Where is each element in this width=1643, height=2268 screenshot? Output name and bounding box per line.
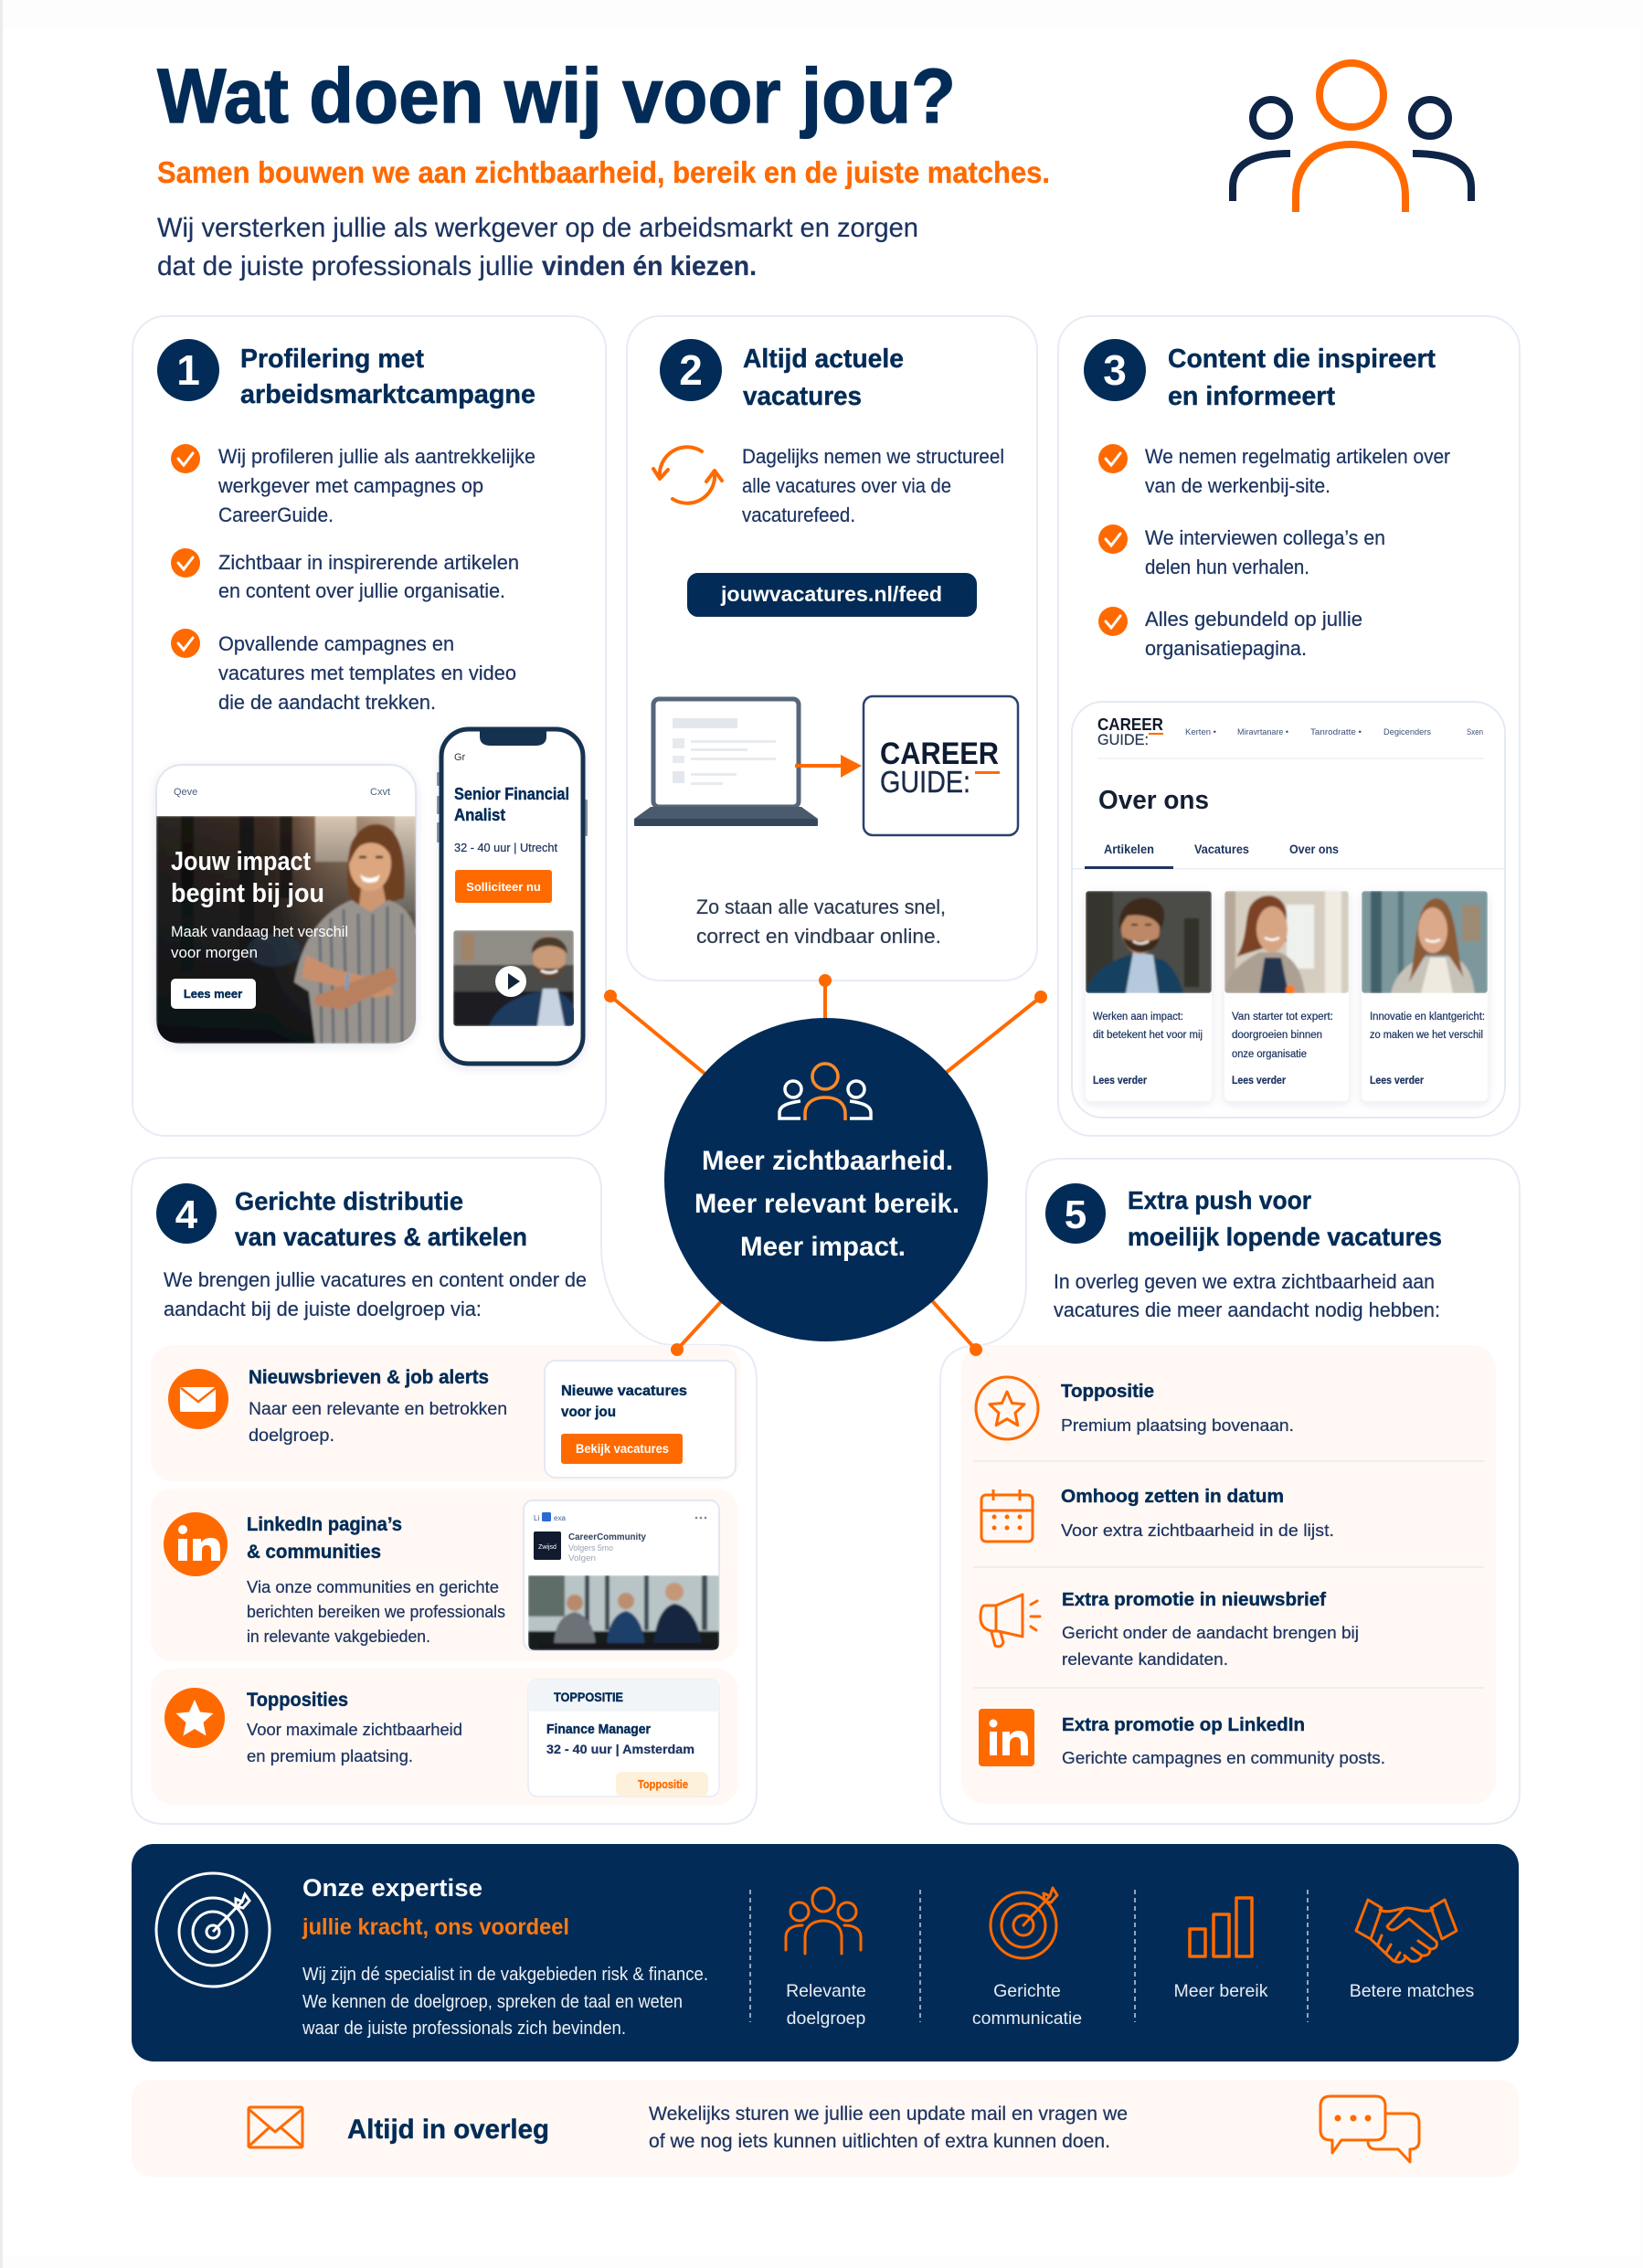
expertise body: waar de juiste professionals zich bevinden.	[302, 2019, 626, 2039]
article card 1	[1086, 891, 1212, 1101]
phone mockup: Gr	[454, 752, 466, 763]
tabs	[1073, 842, 1504, 870]
article card 2: Lees verder	[1232, 1074, 1286, 1086]
panel: push options: Extra promotie op LinkedIn	[1062, 1715, 1305, 1735]
central circle	[664, 1018, 988, 1341]
linkedin post mockup: CareerCommunity	[568, 1532, 646, 1542]
icon: star	[164, 1688, 225, 1748]
row: nieuwsbrieven	[151, 1345, 740, 1481]
bullet text: CareerGuide.	[218, 503, 334, 526]
web campaign mockup: Cxvt	[370, 787, 390, 798]
bullet text: werkgever met campagnes op	[217, 474, 483, 497]
row: nieuwsbrieven: doelgroep.	[249, 1426, 334, 1446]
bullet text: Alles gebundeld op jullie	[1145, 608, 1362, 631]
newsletter mockup: Nieuwe vacatures	[561, 1383, 687, 1399]
subtitle: Samen bouwen we aan zichtbaarheid, bereik en de juiste matches.	[157, 155, 1050, 189]
newsletter mockup: Bekijk vacatures	[576, 1441, 669, 1456]
icon: linkedin square	[979, 1709, 1034, 1766]
article card 2	[1224, 891, 1349, 1101]
logo career guide small: GUIDE:	[1097, 731, 1149, 748]
newsletter mockup: voor jou	[561, 1404, 616, 1420]
article card 3: Lees verder	[1370, 1074, 1424, 1086]
check icon	[171, 444, 200, 473]
navigation: Miravrtanare •	[1237, 727, 1288, 737]
overleg text: Wekelijks sturen we jullie een update mail en vragen we	[649, 2104, 1128, 2125]
expertise heading: jullie kracht, ons voordeel	[302, 1914, 569, 1940]
overleg heading: Altijd in overleg	[347, 2114, 549, 2145]
navigation	[1185, 727, 1483, 737]
intro text	[157, 213, 918, 281]
linkedin post mockup: Zwijsd	[538, 1544, 556, 1551]
bullet text: organisatiepagina.	[1145, 637, 1307, 660]
intro text: vinden én kiezen.	[542, 251, 757, 281]
card 4 content	[151, 1183, 740, 1805]
check icon	[171, 629, 200, 658]
article card 1: Werken aan impact:	[1093, 1012, 1183, 1023]
bullet text	[1145, 526, 1385, 578]
row: linkedin: in relevante vakgebieden.	[247, 1627, 430, 1646]
intro card 5: vacatures die meer aandacht nodig hebben:	[1054, 1298, 1440, 1321]
overleg text	[649, 2104, 1128, 2152]
page title: Over ons	[1098, 786, 1209, 815]
check icon	[171, 548, 200, 578]
tabs: Vacatures	[1194, 842, 1249, 856]
central text: Meer zichtbaarheid.	[702, 1146, 953, 1176]
closing text	[696, 896, 946, 948]
row: nieuwsbrieven: Nieuwsbrieven & job alerts	[249, 1367, 489, 1388]
icon: target orange	[991, 1888, 1057, 1958]
expertise body: We kennen de doelgroep, spreken de taal en weten	[302, 1992, 683, 2012]
intro text: Wij versterken jullie als werkgever op de arbeidsmarkt en zorgen	[157, 213, 918, 243]
number badge 1: 1	[176, 346, 200, 394]
panel: card 4 background	[132, 1158, 757, 1824]
icon: calendar	[981, 1489, 1033, 1542]
button solliciteer	[455, 870, 552, 903]
check icon	[1098, 607, 1128, 636]
button lees meer	[171, 979, 256, 1009]
panel: push options: Toppositie	[1061, 1382, 1154, 1402]
video thumbnail	[453, 930, 578, 1026]
heading card 5: Extra push voor	[1128, 1186, 1311, 1214]
heading card 2	[743, 344, 904, 411]
sync text	[742, 445, 1004, 526]
central text	[694, 1146, 959, 1262]
photo: team	[528, 1575, 719, 1650]
number badge 2	[660, 339, 722, 401]
number badge 5: 5	[1065, 1192, 1086, 1237]
icon: people center	[779, 1064, 871, 1120]
icon: bars	[1190, 1898, 1252, 1956]
row: toppositie: Voor maximale zichtbaarheid	[247, 1721, 462, 1739]
bullet text: die de aandacht trekken.	[218, 691, 436, 714]
button lees meer: Lees meer	[184, 987, 242, 1001]
icon: star outline	[976, 1377, 1038, 1439]
heading card 3: Content die inspireert	[1168, 344, 1436, 374]
bullet text	[217, 445, 535, 526]
row: linkedin: & communities	[247, 1542, 381, 1563]
icon: linkedin	[164, 1512, 228, 1576]
label gerichte communicatie: communicatie	[972, 2008, 1082, 2029]
article card 3	[1362, 891, 1488, 1101]
logo career guide small	[1097, 715, 1163, 748]
navigation: Kerten •	[1185, 727, 1216, 737]
toppositie mockup	[528, 1680, 719, 1796]
row: toppositie: en premium plaatsing.	[247, 1747, 413, 1765]
campaign text: Maak vandaag het verschil	[171, 923, 348, 940]
check icon	[1098, 444, 1128, 473]
heading card 1: arbeidsmarktcampagne	[240, 380, 535, 409]
phone mockup: Analist	[454, 806, 505, 824]
panel: altijd in overleg	[132, 2080, 1519, 2177]
logo career guide small: CAREER	[1097, 715, 1163, 734]
laptop illustration	[634, 699, 818, 826]
heading card 4	[235, 1187, 527, 1251]
article card 2: onze organisatie	[1232, 1049, 1307, 1060]
bullet text: Zichtbaar in inspirerende artikelen	[218, 551, 519, 574]
bullet text: van de werkenbij-site.	[1145, 474, 1330, 497]
number badge 5	[1045, 1183, 1106, 1244]
article card 3: zo maken we het verschil	[1370, 1030, 1483, 1041]
row: toppositie	[151, 1669, 738, 1805]
row: linkedin: LinkedIn pagina’s	[247, 1514, 402, 1535]
panel: card 3 background	[1058, 316, 1520, 1136]
panel: push options: Omhoog zetten in datum	[1061, 1487, 1284, 1507]
heading card 4: van vacatures & artikelen	[235, 1223, 527, 1251]
toppositie mockup: Toppositie	[638, 1777, 688, 1791]
sync text: Dagelijks nemen we structureel	[742, 445, 1004, 468]
tabs: Artikelen	[1104, 842, 1154, 856]
toppositie mockup: TOPPOSITIE	[554, 1690, 623, 1704]
article card 1: dit betekent het voor mij	[1093, 1030, 1203, 1041]
expertise body: Wij zijn dé specialist in de vakgebieden risk & finance.	[302, 1965, 708, 1985]
panel: push options: Voor extra zichtbaarheid in de lijst.	[1061, 1521, 1334, 1540]
bullet text	[1145, 445, 1450, 497]
label relevante doelgroep	[786, 1981, 866, 2029]
label relevante doelgroep: Relevante	[786, 1981, 866, 2001]
panel: push options	[961, 1345, 1496, 1804]
row: linkedin	[151, 1489, 738, 1661]
toppositie mockup: 32 - 40 uur | Amsterdam	[546, 1742, 694, 1756]
heading card 2: Altijd actuele	[743, 344, 904, 374]
expertise heading	[302, 1874, 569, 1940]
bullet text: delen hun verhalen.	[1145, 556, 1309, 578]
article card 2: Van starter tot expert:	[1232, 1012, 1333, 1023]
icon: target white	[156, 1873, 270, 1987]
row: linkedin: berichten bereiken we professionals	[247, 1603, 505, 1621]
intro text: dat de juiste professionals jullie	[157, 251, 534, 281]
panel: card 2 background	[627, 316, 1037, 980]
linkedin post mockup: Volgers 5mo	[568, 1543, 613, 1553]
linkedin post mockup: Volgen	[568, 1553, 596, 1563]
row: toppositie: Topposities	[247, 1690, 348, 1711]
play button	[495, 966, 526, 997]
icon: people outline	[786, 1888, 861, 1954]
button solliciteer: Solliciteer nu	[466, 880, 541, 894]
icon: people header	[1233, 63, 1471, 212]
web campaign mockup	[156, 765, 419, 1044]
bullet text: We nemen regelmatig artikelen over	[1145, 445, 1450, 468]
arrow	[795, 755, 862, 778]
navigation: Tanrodratte •	[1310, 727, 1362, 737]
tabs: Over ons	[1289, 842, 1339, 856]
panel: card 1 background	[132, 316, 606, 1136]
sync text: alle vacatures over via de	[742, 474, 951, 497]
overleg text: of we nog iets kunnen uitlichten of extra kunnen doen.	[649, 2131, 1110, 2152]
label betere matches: Betere matches	[1350, 1981, 1475, 2001]
heading card 5: moeilijk lopende vacatures	[1128, 1223, 1442, 1251]
career guide logo box	[864, 696, 1018, 835]
icon: megaphone	[980, 1595, 1040, 1647]
panel: expertise banner	[132, 1844, 1519, 2061]
phone mockup: 32 - 40 uur | Utrecht	[454, 841, 557, 854]
heading card 3: en informeert	[1168, 382, 1335, 411]
intro card 4: We brengen jullie vacatures en content onder de	[164, 1268, 587, 1291]
panel: push options: Gerichte campagnes en community posts.	[1062, 1748, 1385, 1767]
linkedin post mockup: Li	[534, 1514, 539, 1522]
icon: handshake	[1356, 1900, 1457, 1962]
number badge 1	[157, 339, 219, 401]
heading card 3	[1168, 344, 1436, 411]
label gerichte communicatie: Gerichte	[993, 1981, 1061, 2001]
feed url pill: jouwvacatures.nl/feed	[720, 582, 942, 606]
campaign text: Jouw impact	[171, 847, 311, 876]
bullet text	[218, 551, 519, 602]
label relevante doelgroep: doelgroep	[787, 2008, 866, 2029]
card 2 content	[634, 339, 1018, 948]
sync text: vacaturefeed.	[742, 503, 855, 526]
panel: push options: relevante kandidaten.	[1062, 1649, 1228, 1669]
heading card 1	[240, 344, 535, 409]
web campaign mockup: Qeve	[174, 787, 197, 798]
expertise heading: Onze expertise	[302, 1874, 482, 1902]
navigation: Degicenders	[1383, 727, 1431, 737]
linkedin post mockup	[524, 1500, 719, 1650]
career guide logo box: GUIDE:	[880, 765, 970, 799]
icon: chat bubbles	[1320, 2096, 1419, 2162]
closing text: correct en vindbaar online.	[696, 925, 941, 948]
career guide logo box: CAREER	[880, 737, 999, 771]
panel: push options: Gericht onder de aandacht brengen bij	[1062, 1623, 1359, 1642]
row: linkedin: Via onze communities en gerichte	[247, 1578, 499, 1596]
website mockup card 3	[1072, 702, 1505, 1118]
icon: envelope	[168, 1369, 228, 1429]
expertise body	[302, 1965, 708, 2039]
title: Wat doen wij voor jou?	[157, 53, 956, 139]
bullet text	[1145, 608, 1362, 660]
campaign text: voor morgen	[171, 944, 258, 961]
row: nieuwsbrieven: Naar een relevante en betrokken	[249, 1400, 507, 1419]
connector spokes	[604, 974, 1047, 1356]
central text: Meer relevant bereik.	[694, 1189, 959, 1219]
campaign text	[171, 847, 348, 961]
bullet text: Wij profileren jullie als aantrekkelijke	[218, 445, 535, 468]
panel: card 5 background	[940, 1159, 1520, 1824]
card 5 content	[961, 1183, 1496, 1804]
heading card 2: vacatures	[743, 382, 862, 411]
intro card 4: aandacht bij de juiste doelgroep via:	[164, 1298, 482, 1320]
card 3 content	[1084, 339, 1450, 660]
icon: sync	[653, 447, 722, 503]
intro card 5	[1054, 1270, 1440, 1321]
photo: woman	[156, 816, 419, 1044]
icon: envelope outline	[249, 2107, 302, 2147]
label gerichte communicatie	[972, 1981, 1082, 2029]
number badge 2: 2	[679, 346, 703, 394]
bullet text	[218, 632, 516, 714]
panel: push options: Extra promotie in nieuwsbrief	[1062, 1590, 1326, 1610]
closing text: Zo staan alle vacatures snel,	[696, 896, 946, 918]
number badge 3: 3	[1103, 346, 1127, 394]
bullet text: We interviewen collega’s en	[1145, 526, 1385, 549]
heading card 1: Profilering met	[240, 344, 424, 374]
article card 2: doorgroeien binnen	[1232, 1030, 1322, 1041]
card 1 content	[157, 339, 535, 714]
check icon	[1098, 525, 1128, 554]
article card 3: Innovatie en klantgericht:	[1370, 1012, 1485, 1023]
number badge 3	[1084, 339, 1146, 401]
article card 1: Lees verder	[1093, 1074, 1147, 1086]
toppositie mockup: Finance Manager	[546, 1722, 651, 1737]
feed url pill	[687, 573, 977, 617]
number badge 4: 4	[175, 1192, 198, 1237]
linkedin post mockup: exa	[554, 1514, 566, 1522]
panel: push options: Premium plaatsing bovenaan.	[1061, 1415, 1294, 1435]
central text: Meer impact.	[740, 1232, 906, 1262]
heading card 5	[1128, 1186, 1442, 1251]
bullet text: vacatures met templates en video	[218, 662, 516, 684]
intro card 4	[164, 1268, 587, 1320]
number badge 4	[156, 1183, 217, 1244]
phone mockup	[437, 729, 588, 1064]
intro card 5: In overleg geven we extra zichtbaarheid aan	[1054, 1270, 1435, 1293]
phone mockup: Senior Financial	[454, 785, 569, 803]
newsletter mockup	[545, 1361, 736, 1478]
bullet text: en content over jullie organisatie.	[218, 579, 505, 602]
bullet text: Opvallende campagnes en	[218, 632, 454, 655]
campaign text: begint bij jou	[171, 879, 324, 908]
label meer bereik: Meer bereik	[1174, 1981, 1268, 2001]
heading card 4: Gerichte distributie	[235, 1187, 463, 1215]
navigation: Sxen	[1467, 727, 1483, 737]
